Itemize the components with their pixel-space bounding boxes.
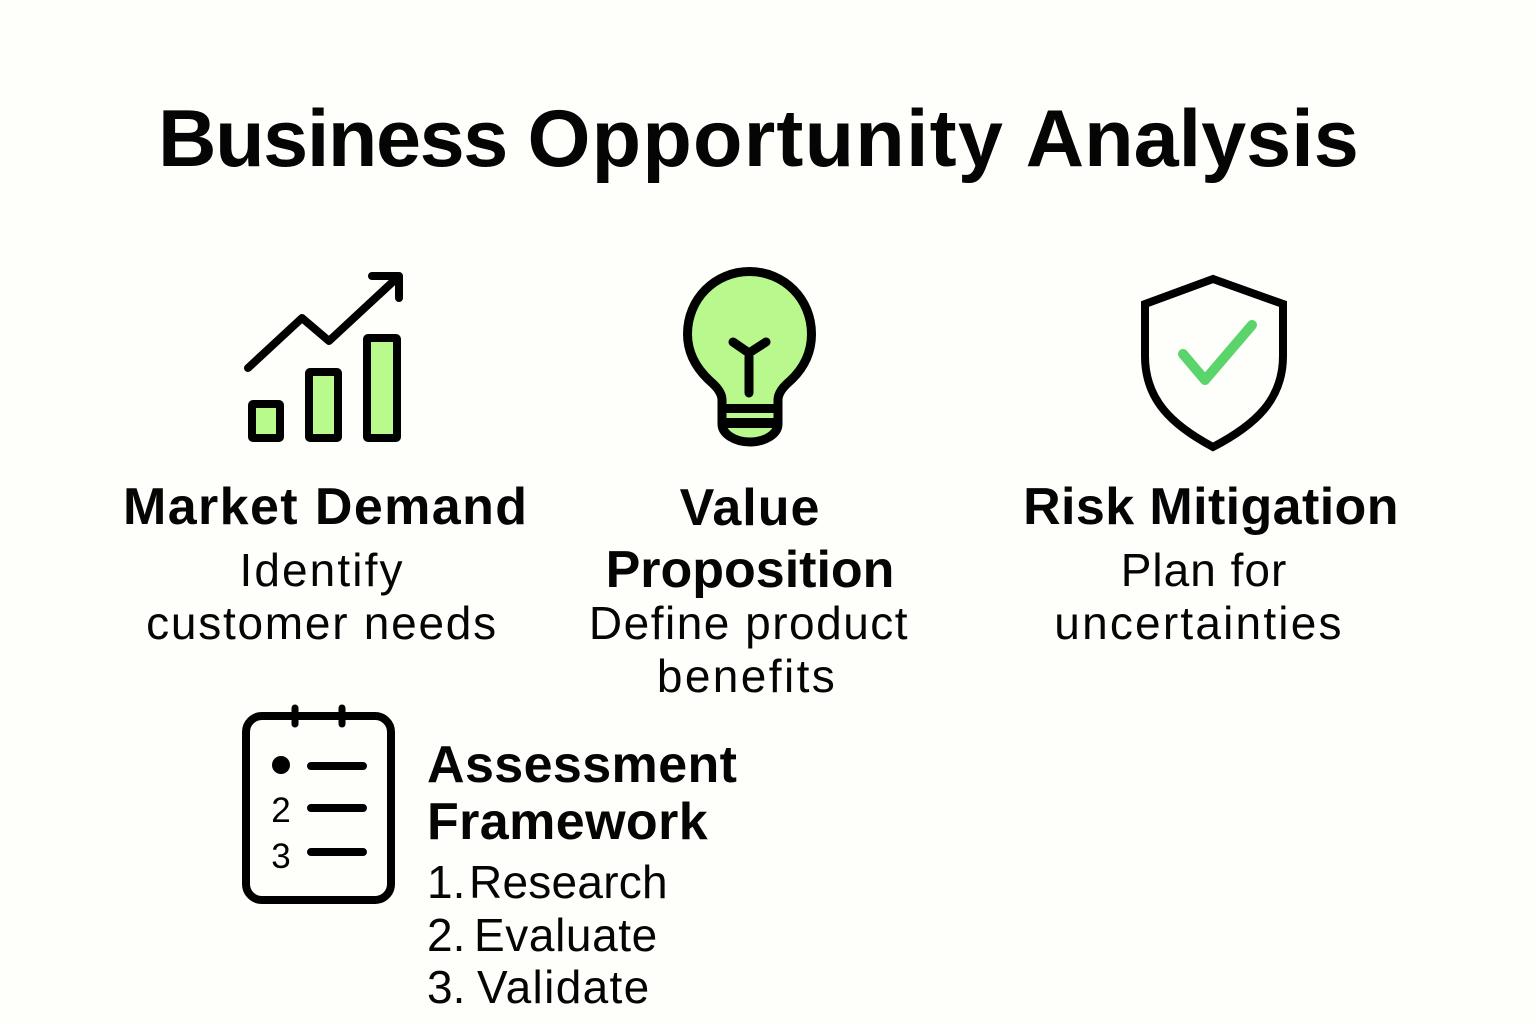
panel: assessment framework	[427, 736, 737, 1013]
icon: shield with check	[1141, 274, 1287, 452]
text: value proposition description	[589, 597, 909, 702]
text: market demand description: Identify	[239, 544, 405, 596]
heading: value proposition	[606, 479, 894, 599]
icon: checklist clipboard	[242, 704, 395, 904]
text: market demand description: customer needs	[146, 597, 498, 649]
icon: checklist clipboard: 2	[271, 791, 291, 830]
text: assessment steps: 1.	[427, 856, 465, 908]
text: assessment steps: Research	[469, 856, 668, 908]
heading: value proposition: Proposition	[606, 541, 894, 599]
text: value proposition description: benefits	[657, 650, 837, 702]
panel: risk mitigation	[1023, 478, 1399, 649]
text: risk mitigation description: Plan for	[1121, 544, 1287, 596]
heading: market demand: Market Demand	[123, 478, 528, 536]
text: assessment steps: 2.	[427, 908, 465, 960]
text: risk mitigation description	[1054, 544, 1344, 649]
text: market demand description	[146, 544, 498, 649]
title: Business Opportunity Analysis	[158, 94, 1359, 184]
icon: checklist clipboard: 3	[271, 837, 291, 876]
heading: assessment framework	[427, 736, 737, 851]
text: assessment steps	[427, 856, 668, 1013]
text: assessment steps: 3.	[427, 961, 465, 1013]
text: value proposition description: Define product	[589, 597, 909, 649]
heading: risk mitigation: Risk Mitigation	[1023, 478, 1399, 536]
heading: assessment framework: Framework	[427, 793, 708, 851]
icon: market growth chart	[244, 272, 403, 442]
panel: value proposition	[589, 479, 909, 702]
panel: market demand	[123, 478, 528, 649]
icon: light bulb	[683, 267, 816, 446]
heading: assessment framework: Assessment	[427, 736, 737, 794]
text: assessment steps: Evaluate	[474, 908, 658, 960]
heading: value proposition: Value	[680, 479, 820, 537]
text: risk mitigation description: uncertainties	[1054, 597, 1344, 649]
text: assessment steps: Validate	[477, 961, 651, 1013]
